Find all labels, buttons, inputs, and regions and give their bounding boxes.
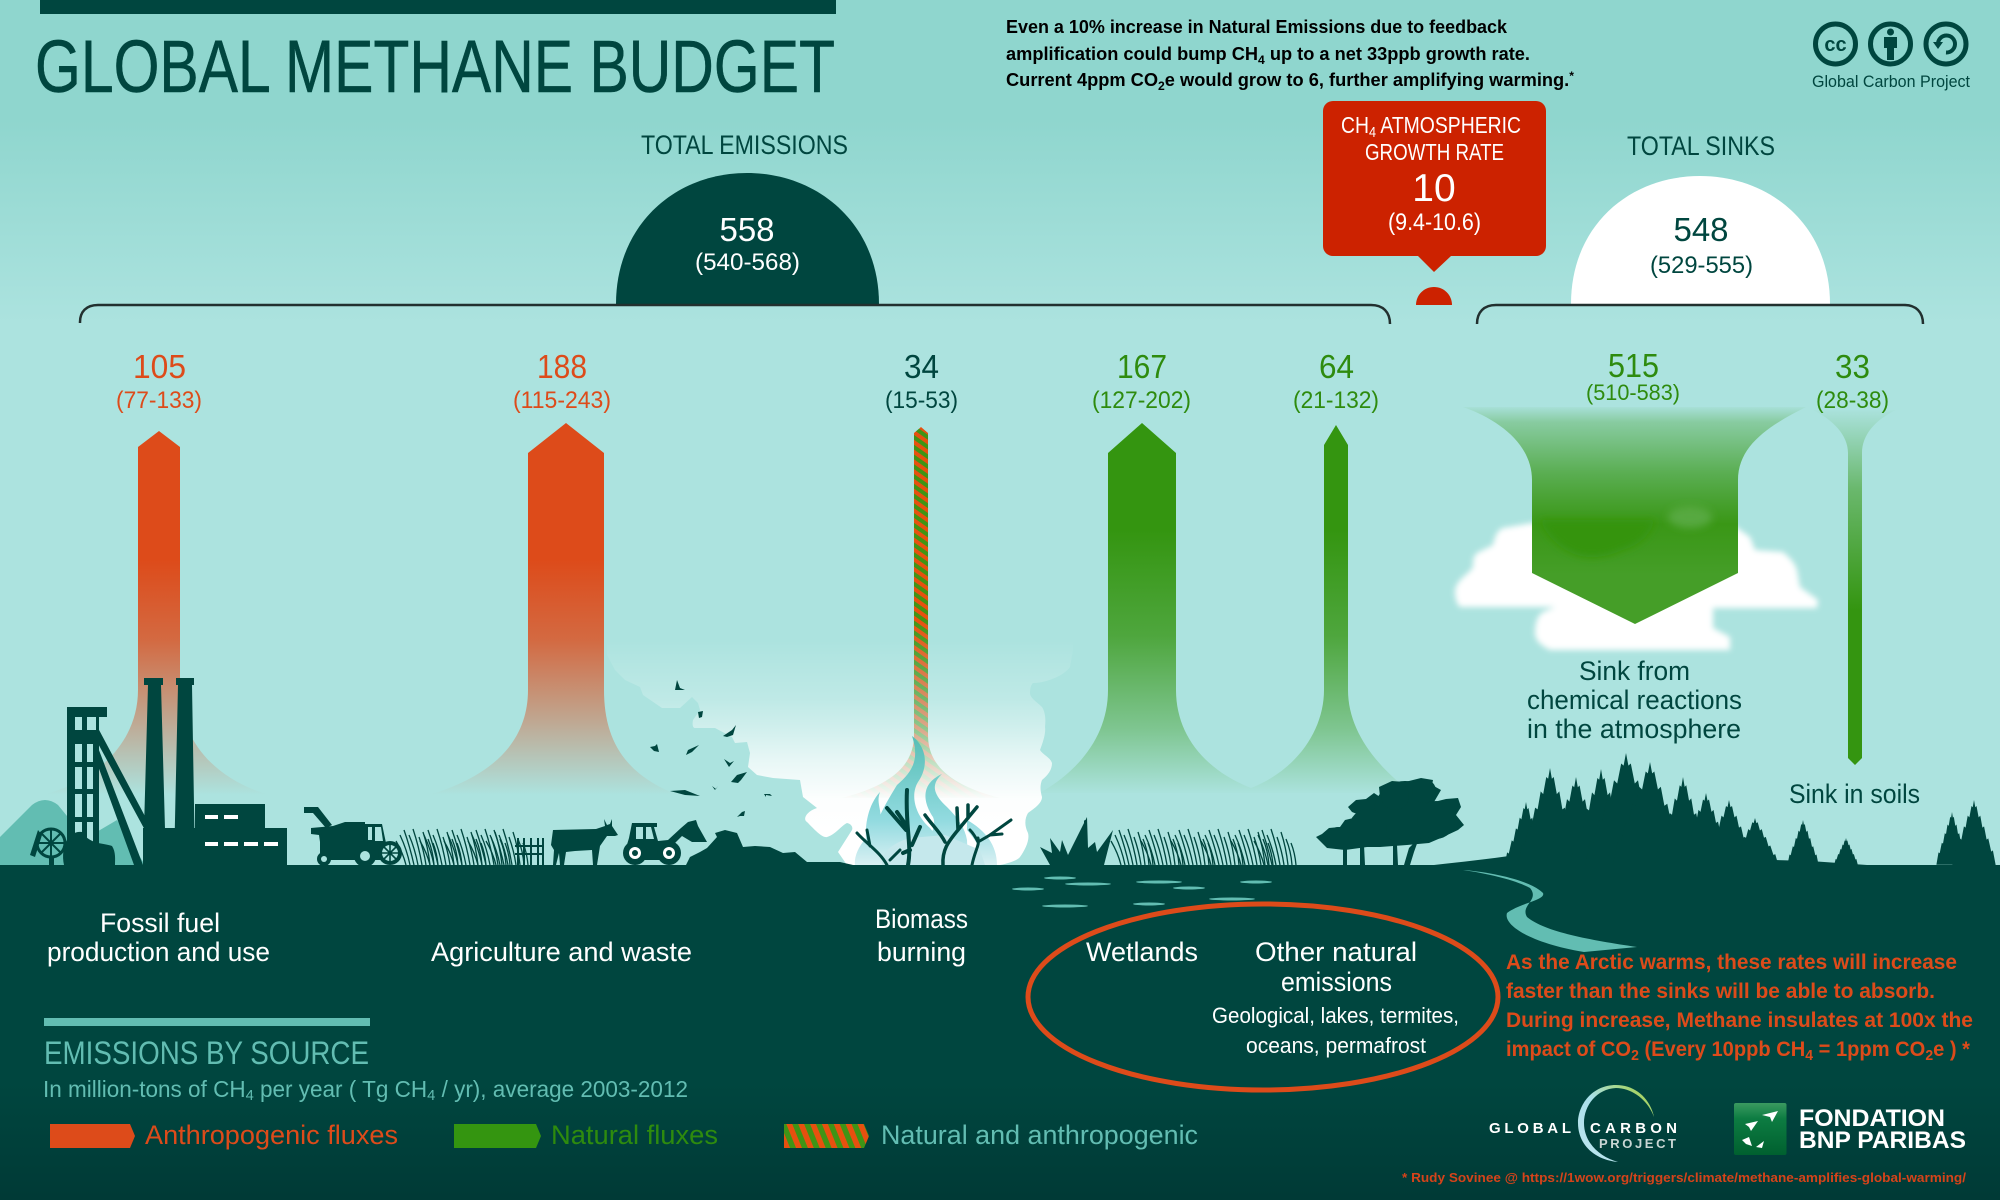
dome: total emissions 558 [616,173,879,304]
dome: total sinks 548 [1571,176,1830,304]
mountains [0,800,145,865]
icon: tractor with bucket [623,820,707,865]
logo: global carbon project: PROJECT [1599,1136,1676,1151]
sink values: 515 [1608,347,1659,384]
title: GLOBAL METHANE BUDGET [35,25,835,108]
dome: total sinks 548: 548 [1673,211,1729,248]
note: natural emissions feedback: 2 [1158,79,1165,93]
units note: In million-tons of CH [43,1076,250,1102]
top bar [40,0,836,14]
note: arctic warming: As the Arctic warms, these rates will increase [1506,950,1957,974]
arrow: other natural emissions [1240,425,1412,793]
icon: waste mound [686,830,853,865]
units note: / yr), average 2003-2012 [435,1076,688,1102]
sink labels: Sink from [1579,656,1690,686]
source labels: Biomass [875,904,968,934]
note: natural emissions feedback: amplification could bump CH [1006,44,1255,64]
icon: reeds and cattails [1040,817,1296,865]
sink labels: chemical reactions [1527,685,1742,715]
birds [650,680,772,817]
footnote: * Rudy Sovinee @ https://1wow.org/triggers/climate/methane-amplifies-global-warming/ [1402,1170,1966,1185]
logo: global carbon project [1489,1085,1677,1162]
emission values: 167 [1117,348,1167,385]
note: arctic warming: = 1ppm CO [1813,1037,1925,1061]
emission values: (127-202) [1092,387,1191,414]
sink labels: Sink in soils [1789,779,1920,809]
callout: CH4 atmospheric growth rate: GROWTH RATE [1365,139,1504,165]
source labels: emissions [1281,967,1392,997]
note: natural emissions feedback: * [1569,69,1574,83]
smoke cloud behind fire [607,600,1073,865]
cloud [1455,523,1818,650]
note: natural emissions feedback [1006,17,1574,93]
logo: fondation BNP Paribas [1734,1103,1966,1155]
arrow: agriculture emissions [429,423,678,795]
source labels: production and use [47,937,270,967]
icon: creative commons licence: cc [1824,34,1847,56]
note: arctic warming: 2 [1925,1047,1933,1064]
icon: combine harvester [304,807,402,867]
emission values: (115-243) [513,387,611,414]
source labels [47,904,1459,1058]
legend rule [44,1018,370,1026]
arrow: chemical reactions sink [1463,407,1806,624]
callout: CH4 atmospheric growth rate: 10 [1412,167,1456,210]
icon: crops [396,829,528,865]
sink values: 33 [1835,348,1870,385]
note: natural emissions feedback: up to a net 33ppb growth rate. [1265,44,1530,64]
sink values [1586,347,1889,414]
dome: total emissions 558: 558 [719,211,775,248]
arrow: fossil fuel emissions [43,431,270,795]
note: arctic warming: During increase, Methane insulates at 100x the [1506,1008,1973,1032]
note: natural emissions feedback: e would grow to 6, further amplifying warming. [1165,70,1569,90]
sink labels: in the atmosphere [1527,714,1741,744]
emission values: 105 [133,348,186,385]
logo: fondation BNP Paribas: FONDATION [1799,1105,1945,1132]
legend: Anthropogenic fluxes [145,1120,398,1150]
small red dome: imbalance [1416,287,1452,305]
callout: CH4 atmospheric growth rate: 4 [1369,124,1376,141]
ground [0,865,2000,1200]
note: arctic warming: e ) * [1933,1037,1971,1061]
icon: fence [515,838,544,865]
total sinks label: TOTAL SINKS [1627,131,1775,161]
icon: fire [855,736,1011,865]
ellipse highlight: natural emissions [1028,904,1498,1090]
icon: creative commons licence [1812,24,1970,91]
units note: 4 [427,1087,435,1104]
dome: total sinks 548: (529-555) [1650,252,1753,279]
icon: trees [1316,778,1464,865]
sink values: (510-583) [1586,380,1680,405]
emission values: (77-133) [116,387,202,414]
source labels: burning [877,937,966,967]
icon: forest [1504,753,1996,870]
sink values: (28-38) [1816,387,1889,414]
source labels: Other natural [1255,937,1417,967]
total emissions label: TOTAL EMISSIONS [641,130,848,160]
note: arctic warming [1506,950,1973,1064]
callout: CH4 atmospheric growth rate: CH [1341,112,1374,138]
legend: Natural fluxes [551,1120,718,1150]
source labels: Geological, lakes, termites, [1212,1003,1459,1028]
logo: fondation BNP Paribas: BNP PARIBAS [1799,1127,1966,1154]
note: arctic warming: 2 [1631,1047,1639,1064]
river [1463,870,1637,952]
source labels: Agriculture and waste [431,937,692,967]
bracket: sinks [1477,305,1923,324]
note: natural emissions feedback: Even a 10% increase in Natural Emissions due to feedback [1006,17,1508,37]
source labels: Wetlands [1086,937,1198,967]
heading: emissions by source: EMISSIONS BY SOURCE [44,1035,369,1071]
bracket: emissions [80,305,1390,324]
icon: fossil fuel industry [30,678,287,865]
source labels: Fossil fuel [100,908,220,938]
legend [50,1120,1198,1150]
emission values [116,348,1379,414]
emission values: 188 [537,348,587,385]
dome: total emissions 558: (540-568) [695,249,800,276]
callout: CH4 atmospheric growth rate [1323,101,1546,272]
note: arctic warming: 4 [1805,1047,1814,1064]
emission values: (15-53) [885,387,958,414]
note: arctic warming: impact of CO [1506,1037,1640,1061]
callout: CH4 atmospheric growth rate: (9.4-10.6) [1388,209,1481,236]
logo: global carbon project: GLOBAL [1489,1120,1571,1137]
source labels: oceans, permafrost [1246,1033,1426,1058]
ground rise [1434,855,1530,865]
arrow: wetlands emissions [1040,423,1251,793]
units note: 4 [246,1087,254,1104]
emission values: 64 [1319,348,1354,385]
ponds [1012,876,1272,908]
icon: cow [551,819,618,865]
callout: CH4 atmospheric growth rate: ATMOSPHERIC [1376,112,1521,138]
note: natural emissions feedback: 4 [1258,53,1265,67]
emission values: (21-132) [1293,387,1379,414]
note: arctic warming: faster than the sinks will be able to absorb. [1506,979,1935,1003]
arrow: biomass burning emissions [858,427,984,794]
units note: per year ( Tg CH [254,1076,427,1102]
note: arctic warming: (Every 10ppb CH [1639,1037,1805,1061]
emission values: 34 [904,348,939,385]
sink labels [1527,656,1920,809]
logo: global carbon project: CARBON [1590,1120,1677,1137]
legend: Natural and anthropogenic [881,1120,1198,1150]
icon: creative commons licence: Global Carbon Project [1812,72,1970,91]
arrow: soil sink [1813,410,1896,765]
note: natural emissions feedback: Current 4ppm CO [1006,70,1156,90]
